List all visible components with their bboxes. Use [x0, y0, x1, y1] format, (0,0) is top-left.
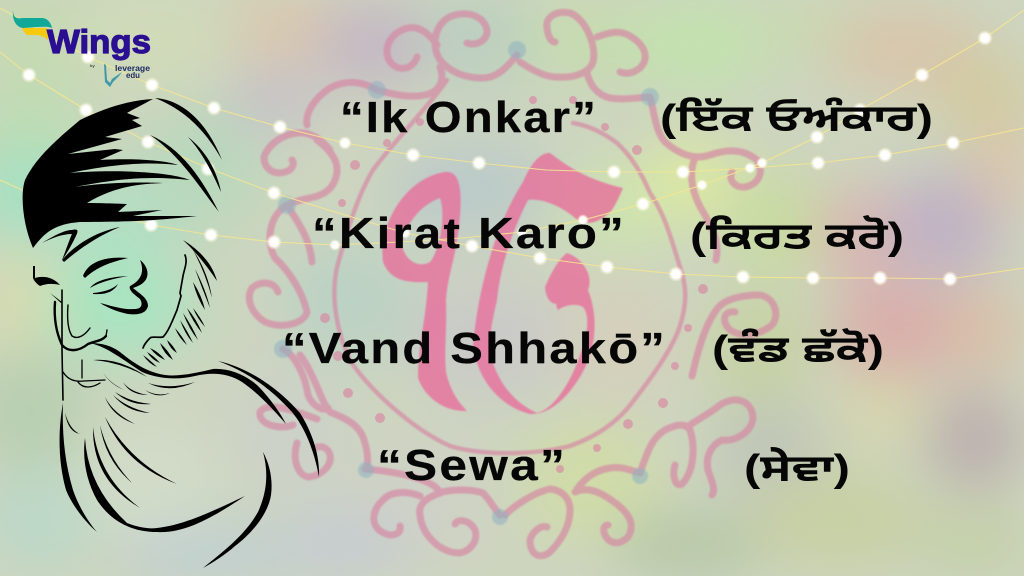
turban	[23, 99, 197, 248]
nose	[33, 266, 62, 303]
brow, eye and cheek	[83, 258, 148, 314]
moustache strands	[93, 360, 195, 424]
line 4: Sewa: (ਸੇਵਾ)	[744, 446, 850, 490]
logo subline: by	[90, 63, 95, 68]
line 3: Vand Shhako	[282, 324, 884, 373]
logo subline: edu	[126, 71, 140, 80]
beard strands	[84, 417, 245, 532]
line 1: Ik Onkar: (ਇੱਕ ਓਅੰਕਾਰ)	[660, 96, 933, 140]
logo swoosh	[13, 10, 52, 40]
line 3: Vand Shhako: (ਵੰਡ ਛੱਕੋ)	[712, 327, 884, 371]
forehead creases	[42, 227, 120, 262]
line 1: Ik Onkar: “Ik Onkar”	[340, 93, 598, 142]
blue knots	[274, 41, 659, 525]
shoulder curve	[218, 361, 319, 477]
mandala scrollwork	[249, 12, 776, 556]
logo subline: leverage	[115, 64, 151, 73]
line 2: Kirat Karo	[312, 209, 904, 258]
portrait of Guru Nanak	[23, 98, 319, 568]
teachings list	[282, 93, 933, 490]
logo: Wings by Leverage Edu	[13, 10, 151, 87]
cheek hair	[143, 240, 217, 367]
line 2: Kirat Karo: “Kirat Karo”	[312, 209, 626, 258]
line 1: Ik Onkar	[340, 93, 933, 142]
logo subline	[90, 63, 151, 87]
face lines	[55, 255, 186, 400]
logo wordmark: Wings	[47, 23, 151, 60]
line 4: Sewa	[377, 441, 850, 490]
mandala with Ik Onkar symbol	[249, 12, 776, 556]
Ik Onkar glyph	[382, 153, 623, 414]
garland of lights	[0, 8, 1024, 287]
inner frame	[334, 80, 685, 453]
line 3: Vand Shhako: “Vand Shhakō”	[282, 324, 667, 373]
line 4: Sewa: “Sewa”	[377, 441, 567, 490]
pink dots	[320, 96, 708, 473]
line 2: Kirat Karo: (ਕਿਰਤ ਕਰੋ)	[690, 214, 904, 258]
turban folds	[150, 98, 222, 212]
moustache and beard outline	[90, 343, 286, 424]
